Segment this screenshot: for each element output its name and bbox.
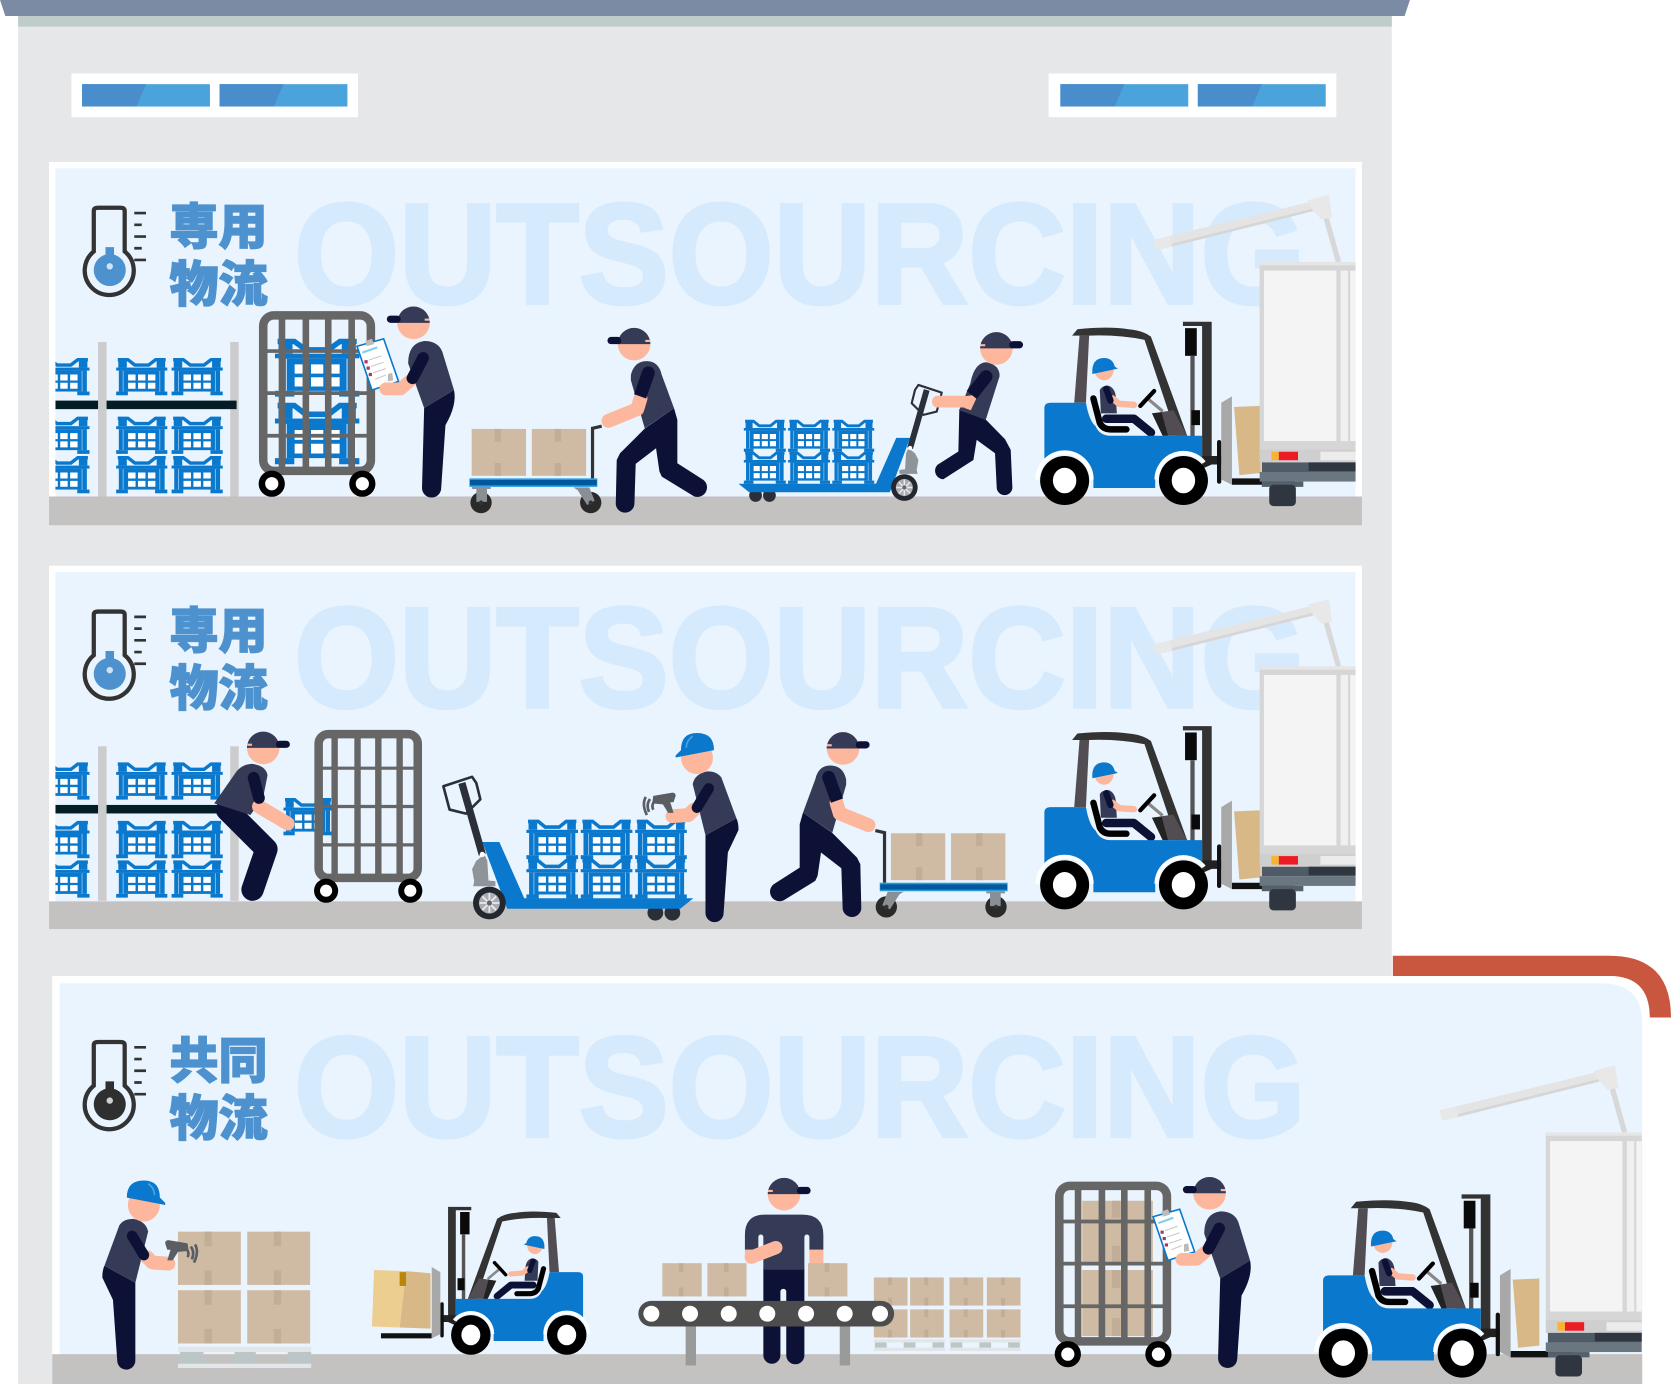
hand cart with boxes	[469, 426, 602, 513]
stacked boxes on pallets	[874, 1277, 1021, 1351]
crate being loaded	[283, 800, 333, 835]
worker pushing cart	[607, 328, 707, 513]
floor	[49, 496, 1362, 525]
worker scanning crates	[644, 733, 739, 922]
worker pulling pallet jack	[935, 332, 1023, 495]
forklift	[1037, 726, 1295, 909]
forklift	[1316, 1194, 1573, 1378]
worker pushing cart	[770, 732, 870, 917]
shelf with crates	[38, 342, 239, 496]
hand cart with boxes	[875, 831, 1008, 918]
truck	[1153, 195, 1356, 506]
panel: dedicated logistics floor 2	[38, 566, 1362, 929]
panel: shared logistics floor 3	[52, 976, 1650, 1384]
pallet jack with crates	[443, 777, 693, 921]
heading: 専用	[169, 605, 267, 659]
forklift carrying box	[372, 1207, 589, 1355]
pallet of boxes	[178, 1232, 311, 1368]
watermark: OUTSOURCING	[294, 1008, 1305, 1167]
heading	[169, 201, 267, 313]
heading: 専用	[169, 201, 267, 255]
truck	[1439, 1065, 1642, 1377]
watermark: OUTSOURCING	[294, 175, 1305, 334]
left windows	[71, 74, 358, 117]
roll cage with boxes	[1055, 1186, 1172, 1367]
worker with clipboard	[357, 307, 455, 498]
heading: 共同	[169, 1035, 267, 1089]
forklift	[1037, 322, 1295, 505]
worker with clipboard	[1153, 1177, 1251, 1368]
empty roll cage	[314, 734, 422, 903]
conveyor belt with boxes	[638, 1263, 894, 1365]
watermark: OUTSOURCING	[294, 579, 1305, 738]
icon: thermometer	[85, 208, 146, 295]
heading	[169, 605, 267, 716]
heading: 物流	[169, 662, 267, 716]
squatting worker	[214, 732, 290, 890]
floor	[52, 1354, 1642, 1384]
right windows	[1049, 74, 1336, 117]
truck	[1153, 599, 1356, 910]
shelf with crates	[38, 746, 239, 901]
worker at conveyor	[745, 1178, 823, 1364]
roll cage with crates	[259, 315, 375, 497]
red roof curve	[1393, 956, 1671, 1017]
roof	[0, 0, 1410, 16]
pallet jack with crates	[739, 385, 942, 502]
panel: dedicated logistics floor 1	[38, 162, 1362, 525]
icon: thermometer	[85, 612, 146, 699]
heading: 物流	[169, 1093, 267, 1147]
icon: thermometer	[85, 1042, 146, 1129]
heading	[169, 1035, 267, 1147]
heading: 物流	[169, 259, 267, 313]
floor	[49, 901, 1362, 929]
worker scanning boxes	[102, 1181, 197, 1370]
